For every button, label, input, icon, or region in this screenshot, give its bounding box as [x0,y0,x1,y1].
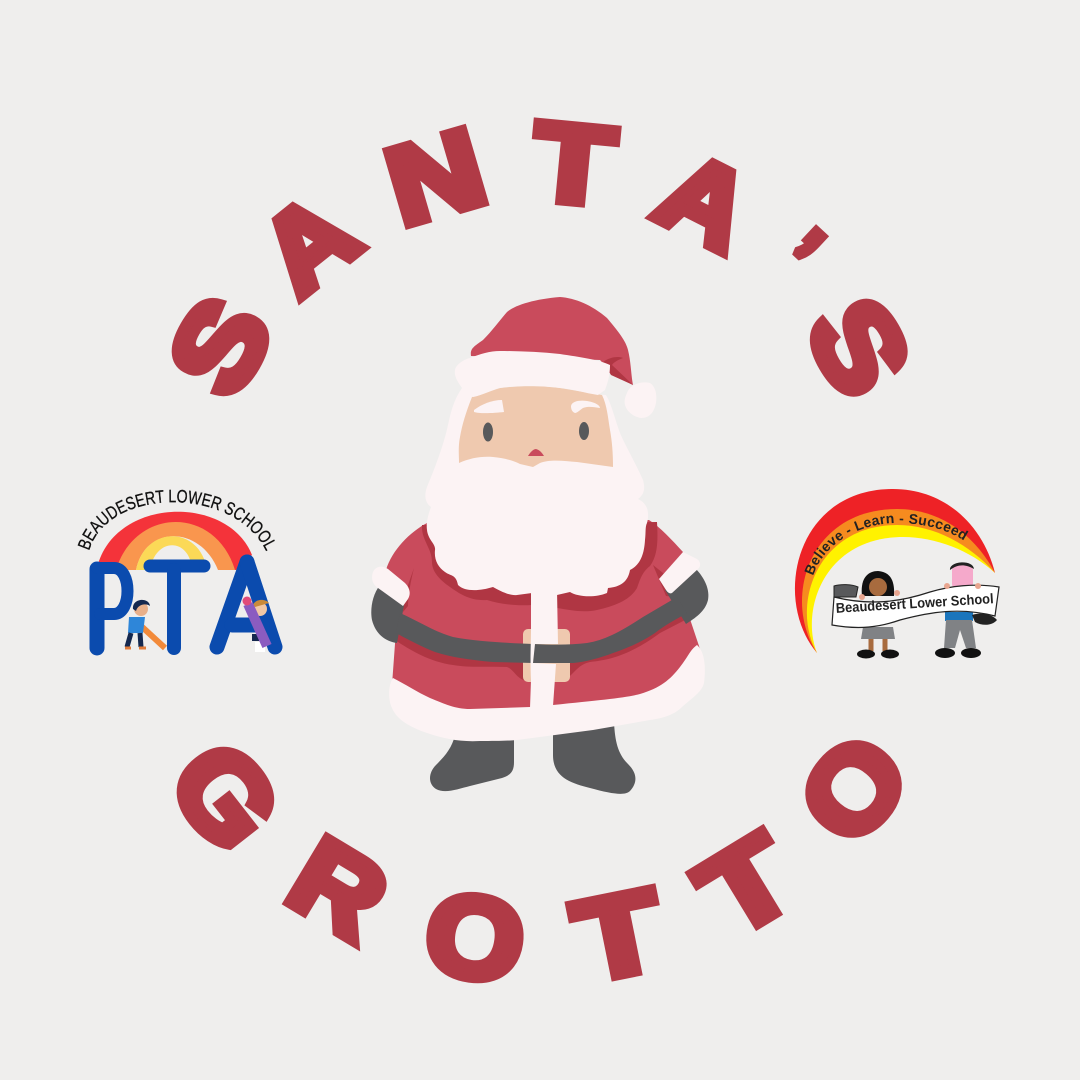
crest motto [813,523,971,576]
heading: SANTA'S: A [639,128,770,276]
PTA girl with purple pencil [242,596,269,652]
PTA boy with orange pencil [125,600,165,648]
coat shading under beard [422,522,657,611]
heading: GROTTO: T [678,809,816,961]
heading: GROTTO: R [269,813,408,964]
heading: GROTTO: O [418,868,532,1008]
PTA school name [89,502,266,551]
eyebrows [474,400,600,413]
heading: GROTTO: O [774,711,934,868]
hat pompom [625,382,656,418]
nose [528,449,544,456]
face [459,386,613,467]
arms [371,568,708,643]
PTA rainbow [98,512,252,570]
crest banner scrolls [834,585,858,597]
sleeve creases [403,565,676,612]
crest banner [832,585,999,627]
PTA letters [97,562,275,648]
illustration: Santa Claus [371,297,708,794]
logo: Beaudesert Lower School PTA [78,490,282,656]
hair and beard [425,388,648,596]
eyes [483,422,589,442]
heading: SANTA'S: N [374,105,498,249]
crest banner text: Beaudesert Lower School [835,590,994,616]
heading: GROTTO [145,711,934,1008]
crest boy [935,562,981,658]
hat brim [455,351,610,397]
belt [396,597,687,663]
crest rainbow [795,489,995,653]
hat fold [603,357,633,385]
logo: Beaudesert Lower School crest: Believe - Learn - Succeed [804,514,968,575]
belt buckle back [523,629,570,682]
heading: GROTTO: T [565,865,672,1006]
coat hem fur [389,645,705,741]
heading: SANTA'S: A [238,169,380,318]
heading: SANTA'S [143,99,936,416]
logo: Beaudesert Lower School crest [794,489,1000,658]
belt shadow [395,612,689,682]
boots [430,722,635,794]
heading: SANTA'S: S [143,276,297,415]
cuffs [372,552,700,606]
heading: SANTA'S: ’ [747,209,843,310]
coat centre strip [530,590,558,708]
heading: SANTA'S: T [528,99,619,229]
crest girl [857,571,899,658]
hat [471,297,633,385]
heading: SANTA'S: S [782,277,936,416]
crest hands [859,583,981,600]
coat [386,520,702,715]
logo: Beaudesert Lower School PTA: BEAUDESERT LOWER SCHOOL [78,490,275,552]
heading: GROTTO: G [145,719,305,874]
